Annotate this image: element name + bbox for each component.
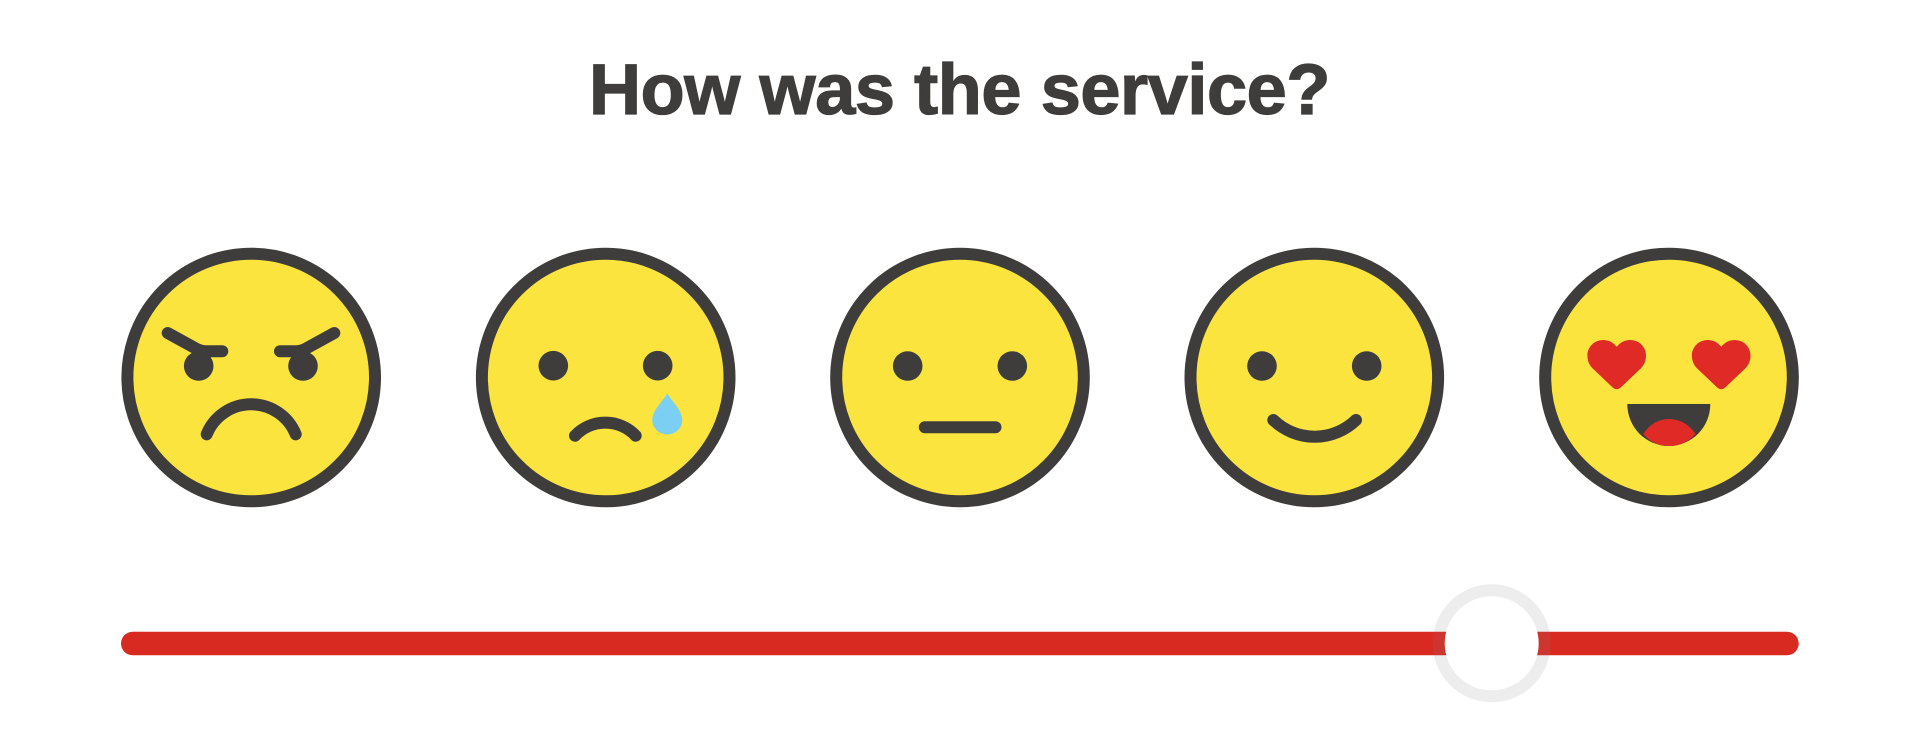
rating slider	[121, 590, 1799, 696]
icon: angry face	[127, 254, 375, 501]
icon: neutral face	[836, 254, 1084, 501]
title: How was the service?	[589, 51, 1330, 130]
icon: smiling face	[1190, 254, 1438, 501]
icon: heart-eyes face	[1545, 254, 1793, 501]
icon: crying face	[482, 254, 730, 501]
